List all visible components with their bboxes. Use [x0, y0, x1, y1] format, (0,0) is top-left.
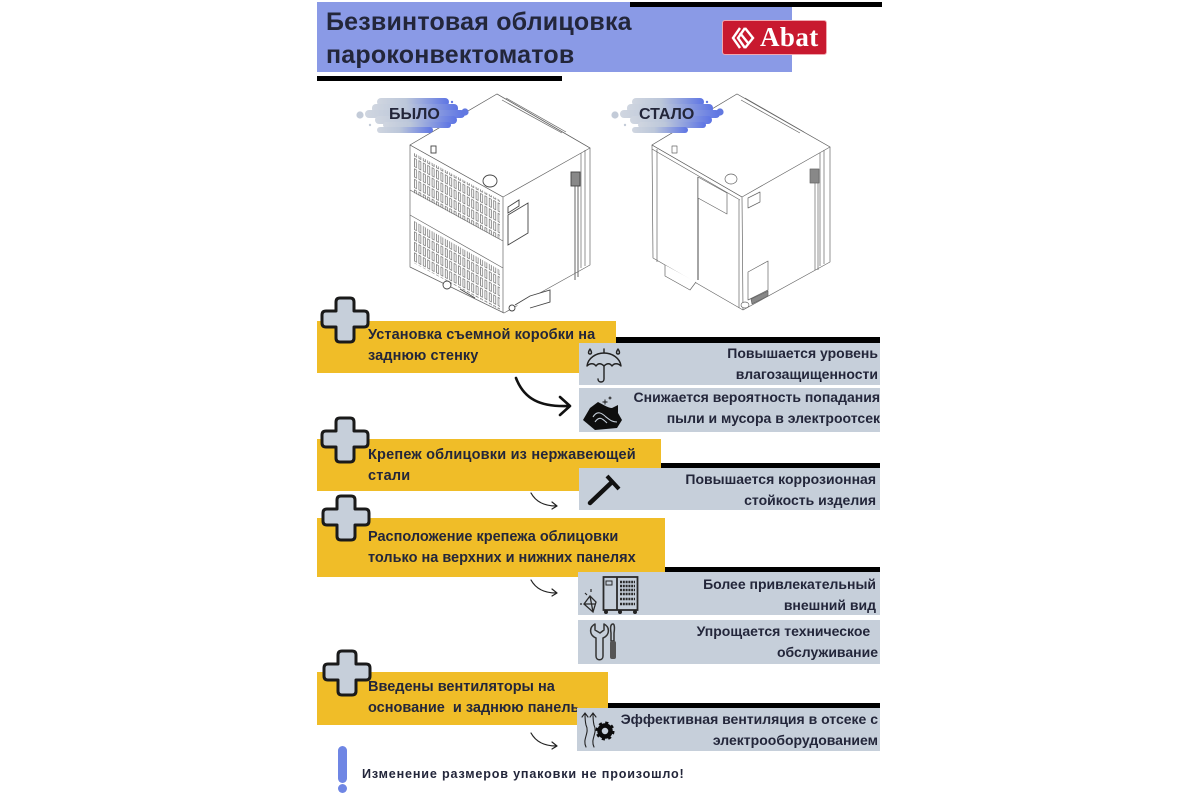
card text: Упрощается техническое	[697, 623, 870, 639]
black bar 3	[665, 567, 880, 572]
icon: wrench and screwdriver	[590, 623, 616, 660]
bottom black bar	[317, 76, 562, 81]
feature 1 text: заднюю стенку	[368, 348, 478, 364]
badge blob	[612, 98, 724, 133]
card text: Более привлекательный	[703, 576, 876, 592]
feature 1 text	[368, 327, 596, 364]
logo: Abat	[722, 20, 827, 55]
badge text: БЫЛО	[389, 106, 440, 123]
title	[326, 8, 632, 68]
icon: air flow and gear	[582, 712, 614, 748]
title: Безвинтовая облицовка	[326, 8, 632, 36]
card: moisture protection	[579, 343, 880, 385]
card text: Повышается уровень	[727, 345, 878, 361]
arrow 4	[530, 732, 558, 750]
card text: электрооборудованием	[713, 732, 878, 748]
top black bar	[630, 2, 882, 7]
card text: стойкость изделия	[744, 492, 876, 508]
panel: feature 1 header	[317, 321, 616, 373]
arrow 2	[530, 492, 558, 510]
panel: feature 2 header	[317, 439, 661, 491]
card text	[703, 576, 876, 613]
feature 4 text: основание и заднюю панель	[368, 700, 579, 716]
arrow 3	[530, 579, 558, 597]
panel: title banner	[317, 2, 792, 72]
black bar 4	[608, 703, 880, 708]
feature 4 text: Введены вентиляторы на	[368, 679, 555, 695]
card text	[727, 345, 878, 382]
icon: dust and hand	[583, 396, 622, 430]
illustration: machine after	[652, 94, 830, 310]
card text: пыли и мусора в электроотсек	[667, 410, 880, 426]
card text	[696, 623, 878, 660]
feature 3 text: Расположение крепежа облицовки	[368, 529, 618, 545]
feature 3 text	[368, 529, 636, 566]
card text: Повышается коррозионная	[685, 471, 876, 487]
icon: plus 3	[322, 494, 370, 542]
feature 1 text: Установка съемной коробки на	[368, 327, 595, 343]
card: appearance	[578, 572, 880, 615]
card text: Снижается вероятность попадания	[634, 389, 880, 405]
icon: logo diamond	[732, 27, 754, 49]
card text: обслуживание	[777, 644, 878, 660]
icon: exclamation mark	[338, 746, 347, 793]
panel: feature 4 header	[317, 672, 608, 725]
black bar 2	[661, 463, 880, 468]
arrow 1	[514, 376, 572, 416]
card text	[685, 471, 876, 508]
icon: plus 1	[320, 296, 370, 344]
logo wordmark: Abat	[760, 22, 819, 52]
card text: влагозащищенности	[736, 366, 878, 382]
feature 2 text	[368, 447, 636, 484]
feature 2 text: стали	[368, 468, 410, 484]
title: пароконвектоматов	[326, 40, 574, 68]
black bar 1	[616, 337, 880, 343]
note text: Изменение размеров упаковки не произошло!	[362, 767, 685, 781]
card text: Эффективная вентиляция в отсеке с	[621, 711, 878, 727]
icon: screw	[588, 474, 620, 506]
badge: СТАЛО	[612, 98, 724, 133]
badge: БЫЛО	[356, 98, 469, 133]
card text	[634, 389, 880, 426]
panel: feature 3 header	[317, 518, 665, 577]
icon: umbrella	[586, 348, 622, 383]
feature 4 text	[368, 679, 579, 716]
card: maintenance	[578, 620, 880, 664]
feature 3 text: только на верхних и нижних панелях	[368, 550, 636, 566]
illustration: machine before	[410, 94, 590, 314]
card text	[621, 711, 878, 748]
icon: plus 2	[320, 416, 370, 464]
card: ventilation	[577, 708, 880, 751]
card: corrosion resistance	[579, 468, 880, 510]
icon: plus 4	[322, 650, 372, 696]
feature 2 text: Крепеж облицовки из нержавеющей	[368, 447, 636, 463]
card text: внешний вид	[784, 597, 876, 613]
icon: diamond and oven	[580, 576, 638, 614]
badge blob	[356, 98, 469, 133]
card: dust protection	[579, 388, 880, 432]
badge text: СТАЛО	[639, 106, 694, 123]
